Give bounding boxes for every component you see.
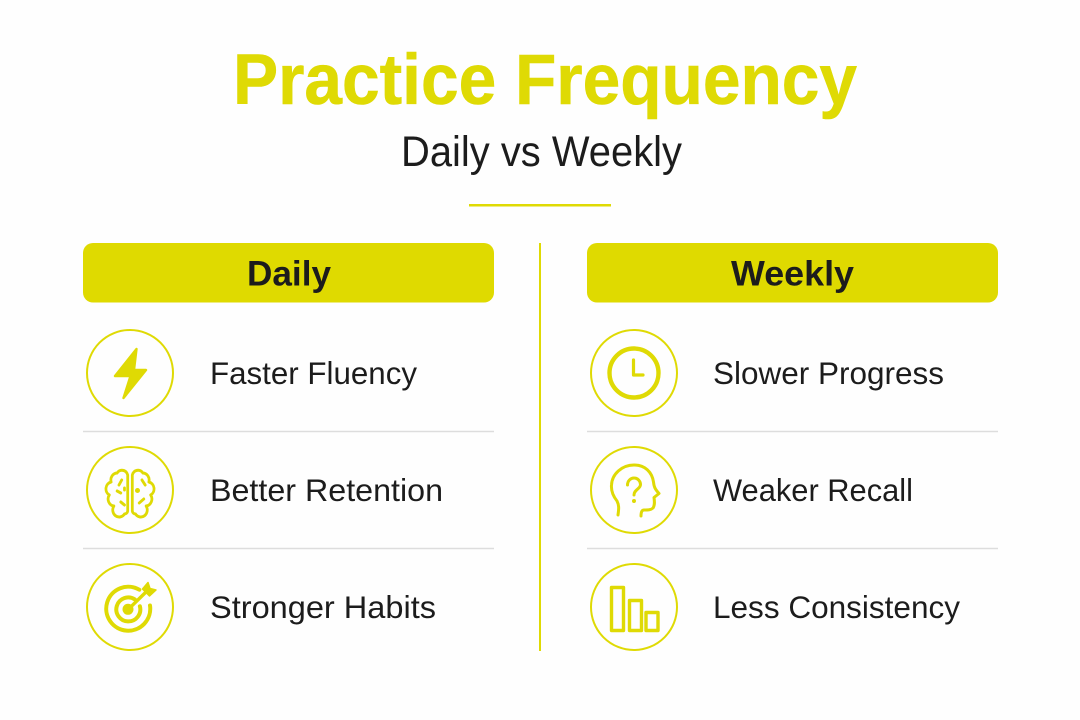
icon: head with question mark [591, 447, 677, 533]
title: Practice Frequency [233, 41, 857, 120]
subtitle: Daily vs Weekly [401, 128, 682, 176]
daily header [83, 243, 494, 302]
label: faster fluency: Faster Fluency [210, 355, 417, 391]
icon: target with arrow [87, 564, 173, 650]
weekly header [587, 243, 998, 302]
label: weaker recall: Weaker Recall [713, 472, 913, 508]
title underline [469, 204, 611, 206]
label: better retention: Better Retention [210, 472, 443, 508]
weekly header: Weekly [731, 254, 855, 294]
icon: clock [591, 330, 677, 416]
label: slower progress: Slower Progress [713, 355, 944, 391]
center divider [539, 243, 541, 651]
daily header: Daily [247, 254, 332, 294]
label: stronger habits: Stronger Habits [210, 589, 436, 625]
icon: brain [87, 447, 173, 533]
panel: weekly [587, 243, 998, 650]
panel: daily [83, 243, 494, 650]
icon: lightning bolt [87, 330, 173, 416]
label: less consistency: Less Consistency [713, 589, 960, 625]
icon: declining bars [591, 564, 677, 650]
